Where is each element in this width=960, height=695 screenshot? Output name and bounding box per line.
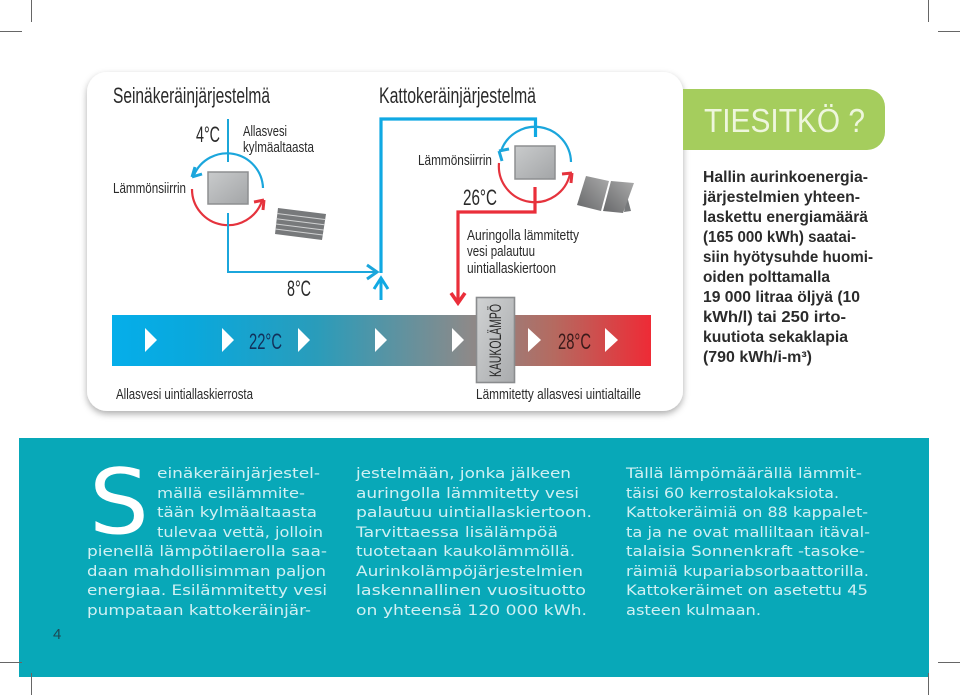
label: 8 degrees: 8°C xyxy=(287,276,311,301)
label: cold water from pool: Allasvesi xyxy=(243,123,287,140)
heading: roof collector system: Kattokeräinjärjestelmä xyxy=(379,83,537,108)
label: pool water from circulation: Allasvesi uintiallaskierrosta xyxy=(116,386,253,403)
text column 3: talaisia Sonnenkraft -tasoke- xyxy=(626,544,865,560)
label: 26 degrees: 26°C xyxy=(463,185,497,210)
label: kaukolampo: KAUKOLÄMPÖ xyxy=(486,304,505,377)
text column 1: mällä esilämmite- xyxy=(157,486,305,502)
panel: diagram card xyxy=(87,72,683,411)
label: 22 degrees: 22°C xyxy=(249,329,282,354)
text block: did you know: (165 000 kWh) saatai- xyxy=(703,229,856,246)
label: solar heated water returns xyxy=(467,227,579,277)
text block: did you know: kuutiota sekaklapia xyxy=(703,329,848,346)
label: solar heated water returns: vesi palautuu xyxy=(467,243,535,260)
text block: did you know: (790 kWh/i-m³) xyxy=(703,349,812,366)
text column 1 xyxy=(87,450,327,619)
text column 2: laskennallinen vuosituotto xyxy=(356,583,586,599)
text block: did you know: laskettu energiamäärä xyxy=(703,209,868,226)
label: 28 degrees: 28°C xyxy=(558,329,591,354)
label: heat exchanger left: Lämmönsiirrin xyxy=(113,180,186,197)
text column 2: on yhteensä 120 000 kWh. xyxy=(356,603,587,619)
text column 1: pienellä lämpötilaerolla saa- xyxy=(87,544,327,560)
text block: did you know: 19 000 litraa öljyä (10 xyxy=(703,289,860,306)
text block: did you know: järjestelmien yhteen- xyxy=(702,189,860,206)
text block: did you know xyxy=(702,169,873,366)
icon: wall heat exchanger xyxy=(208,172,248,204)
label: solar heated water returns: Auringolla lämmitetty xyxy=(467,227,579,244)
icon: roof solar panels xyxy=(577,176,634,213)
text block: did you know: kWh/l) tai 250 irto- xyxy=(703,309,846,326)
label: heated pool water: Lämmitetty allasvesi uintialtaille xyxy=(476,386,641,403)
text column 3: Tällä lämpömäärällä lämmit- xyxy=(625,466,862,482)
text column 3 xyxy=(625,466,870,619)
text block: did you know: oiden polttamalla xyxy=(703,269,830,286)
text column 1: einäkeräinjärjestel- xyxy=(157,466,320,482)
text column 2: jestelmään, jonka jälkeen xyxy=(355,466,571,482)
panel: tiesitko green header xyxy=(683,89,885,150)
text column 1: tään kylmäaltaasta xyxy=(157,505,317,521)
text column 1: pumpataan kattokeräinjär- xyxy=(87,603,311,619)
text column 3: Kattokeräimet on asetettu 45 xyxy=(626,583,868,599)
icons: flow arrows xyxy=(145,328,618,352)
icon: wall collector xyxy=(275,208,326,240)
label: heat exchanger right: Lämmönsiirrin xyxy=(418,152,492,169)
text block: did you know: siin hyötysuhde huomi- xyxy=(703,249,873,266)
heading: wall collector system: Seinäkeräinjärjestelmä xyxy=(113,83,271,108)
icon: roof heat exchanger xyxy=(515,146,555,179)
diagram: wall collector circuit xyxy=(192,119,377,279)
icon: district heating box xyxy=(476,298,514,382)
chart: temperature gradient bar xyxy=(112,315,651,366)
text column 3: räimiä kupariabsorbaattorilla. xyxy=(626,564,869,580)
text column 2: auringolla lämmitetty vesi xyxy=(356,486,579,502)
text column 1: tulevaa vettä, jolloin xyxy=(157,525,323,541)
text column 2: palautuu uintiallaskiertoon. xyxy=(356,505,592,521)
text column 3: asteen kulmaan. xyxy=(626,603,761,619)
text column 2 xyxy=(355,466,592,619)
diagram: roof collector circuit xyxy=(374,119,572,303)
text block: did you know: Hallin aurinkoenergia- xyxy=(703,169,868,186)
label: solar heated water returns: uintiallaskiertoon xyxy=(467,260,556,277)
page number: 4 xyxy=(53,626,61,643)
drop cap: S xyxy=(89,450,149,555)
text column 2: Aurinkolämpöjärjestelmien xyxy=(356,564,583,580)
text column 3: täisi 60 kerrostalokaksiota. xyxy=(626,486,839,502)
text column 2: Tarvittaessa lisälämpöä xyxy=(355,525,558,541)
text column 3: ta ja ne ovat malliltaan itäval- xyxy=(626,525,870,541)
panel: teal text section xyxy=(19,438,929,677)
text column 2: tuotetaan kaukolämmöllä. xyxy=(356,544,575,560)
heading: tiesitko: TIESITKÖ ? xyxy=(704,102,865,139)
text column 1: energiaa. Esilämmitetty vesi xyxy=(87,583,327,599)
text column 1: daan mahdollisimman paljon xyxy=(87,564,326,580)
label: 4 degrees: 4°C xyxy=(196,122,220,147)
label: cold water from pool: kylmäaltaasta xyxy=(243,139,314,156)
label: cold water from pool xyxy=(243,123,314,156)
text column 3: Kattokeräimiä on 88 kappalet- xyxy=(626,505,868,521)
